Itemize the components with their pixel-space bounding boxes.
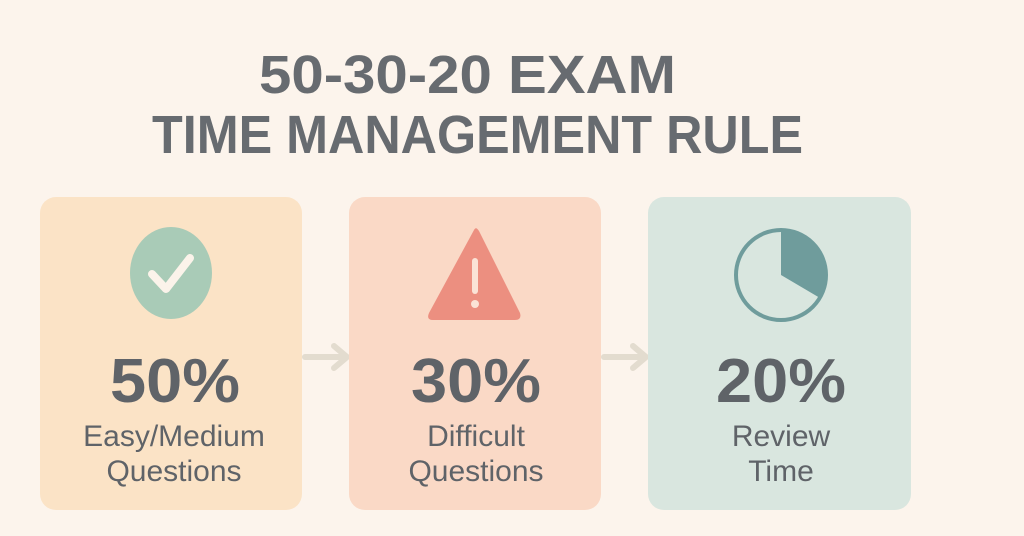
label easy/medium: Easy/Medium bbox=[83, 420, 265, 453]
title: TIME MANAGEMENT RULE bbox=[152, 105, 803, 165]
arrow 1 bbox=[305, 346, 347, 368]
percentage 20%: 20% bbox=[716, 347, 846, 416]
label difficult: Difficult bbox=[427, 420, 526, 453]
percentage 30%: 30% bbox=[411, 347, 541, 416]
panel: easy/medium bbox=[40, 197, 302, 510]
title bbox=[152, 45, 803, 165]
icon: pie clock bbox=[736, 230, 826, 320]
label review time: Review bbox=[732, 420, 831, 453]
arrow 2 bbox=[604, 346, 646, 368]
label easy/medium: Questions bbox=[106, 455, 242, 488]
label difficult: Questions bbox=[408, 455, 544, 488]
icon: check circle bbox=[130, 227, 212, 319]
panel: difficult bbox=[349, 197, 601, 510]
icon: warning triangle bbox=[428, 228, 520, 320]
label review time bbox=[732, 420, 831, 488]
label easy/medium bbox=[83, 420, 265, 488]
panel: review bbox=[648, 197, 911, 510]
label review time: Time bbox=[748, 455, 814, 488]
percentage 50%: 50% bbox=[110, 347, 240, 416]
label difficult bbox=[408, 420, 544, 488]
title: 50-30-20 EXAM bbox=[259, 45, 676, 105]
